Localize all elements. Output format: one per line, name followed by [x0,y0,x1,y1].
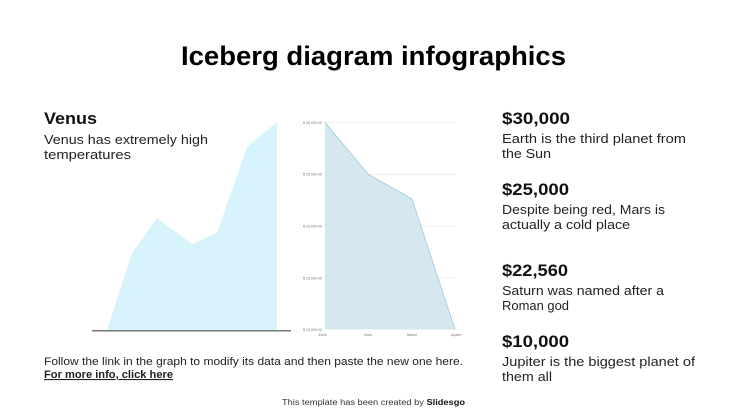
stat: $25,000: $25,000 [502,180,569,199]
chart: area chart of values: $ 20,000.00 [303,224,322,228]
chart: area chart of values: $ 30,000.00 [303,121,322,125]
chart: area chart of values: Jupiter [451,333,462,337]
stat: $25,000: actually a cold place [502,217,630,232]
text: Venus description [44,132,208,162]
title: Iceberg diagram infographics [181,41,566,71]
text: instructions: Follow the link in the graph to modify its data and then paste the new one here. [44,356,463,368]
stat: $10,000: Jupiter is the biggest planet of [502,354,695,369]
stat: $30,000: Earth is the third planet from [502,131,686,146]
stat: $22,560 [502,261,665,313]
chart: area chart of values: Earth [319,333,327,337]
stat: $30,000: $30,000 [502,109,570,128]
credit: This template has been created by Slidesgo [282,398,465,407]
text: Venus description: temperatures [44,147,132,162]
chart: area chart of values: Mars [364,333,372,337]
waterline [92,330,291,332]
stat: $10,000: $10,000 [502,332,569,351]
chart: area chart of values: $ 15,000.00 [303,276,322,280]
chart: iceberg shape above the waterline [107,122,277,330]
stat: $10,000: them all [502,369,552,384]
stat: $10,000 [502,332,695,384]
panel: Venus description [44,109,208,162]
chart: area chart of values: $ 25,000.00 [303,172,322,176]
stat: $22,560: Roman god [502,298,569,313]
chart: area chart of values [303,121,462,337]
chart: area chart of values: $ 10,000.00 [303,328,322,332]
stat: $30,000: the Sun [502,146,551,161]
text: Venus description: Venus has extremely high [44,132,208,147]
heading: Venus: Venus [44,109,97,128]
stat: $25,000: Despite being red, Mars is [502,202,666,217]
chart: area chart of values: Saturn [407,333,417,337]
link: more info: For more info, click here [44,369,173,381]
stat: $22,560: Saturn was named after a [502,283,665,298]
stat: $22,560: $22,560 [502,261,568,280]
stat: $25,000 [502,180,666,232]
stat: $30,000 [502,109,686,161]
